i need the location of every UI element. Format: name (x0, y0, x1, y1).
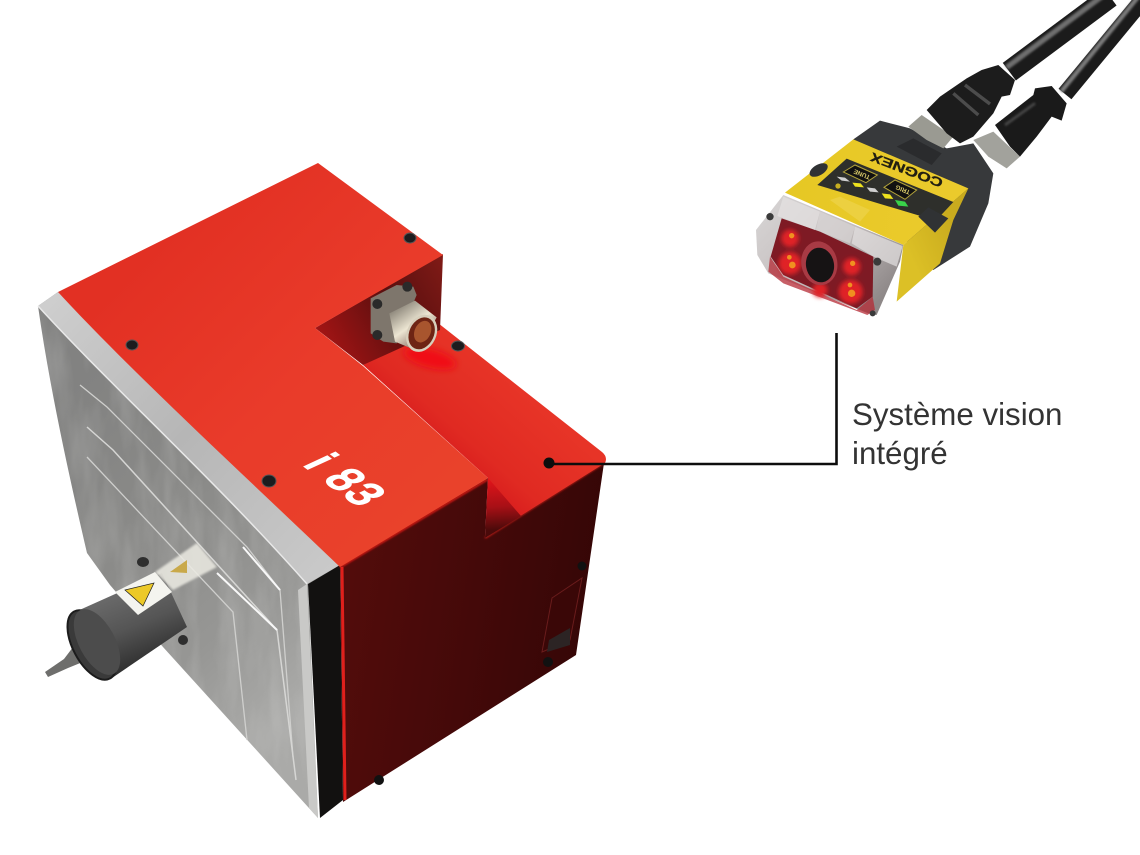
label panel (817, 159, 953, 221)
cables (1007, 0, 1140, 94)
silver side panel (38, 292, 340, 818)
black edge strip (308, 565, 343, 818)
label panel: TRIG (895, 183, 911, 195)
lower red surface (363, 323, 606, 538)
screw caps (807, 160, 948, 233)
dark red front face (340, 463, 604, 802)
step wall glow (485, 478, 521, 538)
callout label: Système vision (852, 397, 1062, 432)
callout leader line (544, 333, 836, 468)
red top plate (58, 163, 488, 567)
connector two (973, 86, 1067, 168)
yellow side face (897, 188, 968, 302)
dark rear tab (897, 138, 942, 165)
connector one (908, 65, 1015, 148)
yellow top surface (785, 139, 968, 245)
marking head device (38, 163, 606, 818)
COGNEX brand text: COGNEX (868, 149, 945, 190)
connector recess (315, 254, 443, 365)
product logo i83: i 83 (293, 448, 398, 513)
label panel: TUNE (853, 167, 871, 180)
screws (126, 233, 464, 487)
lens housing (756, 195, 903, 316)
camera vision system (756, 0, 1140, 316)
circular connector (371, 282, 458, 374)
stylus (45, 543, 217, 687)
callout label: intégré (852, 436, 948, 471)
dark rear housing (853, 121, 993, 270)
